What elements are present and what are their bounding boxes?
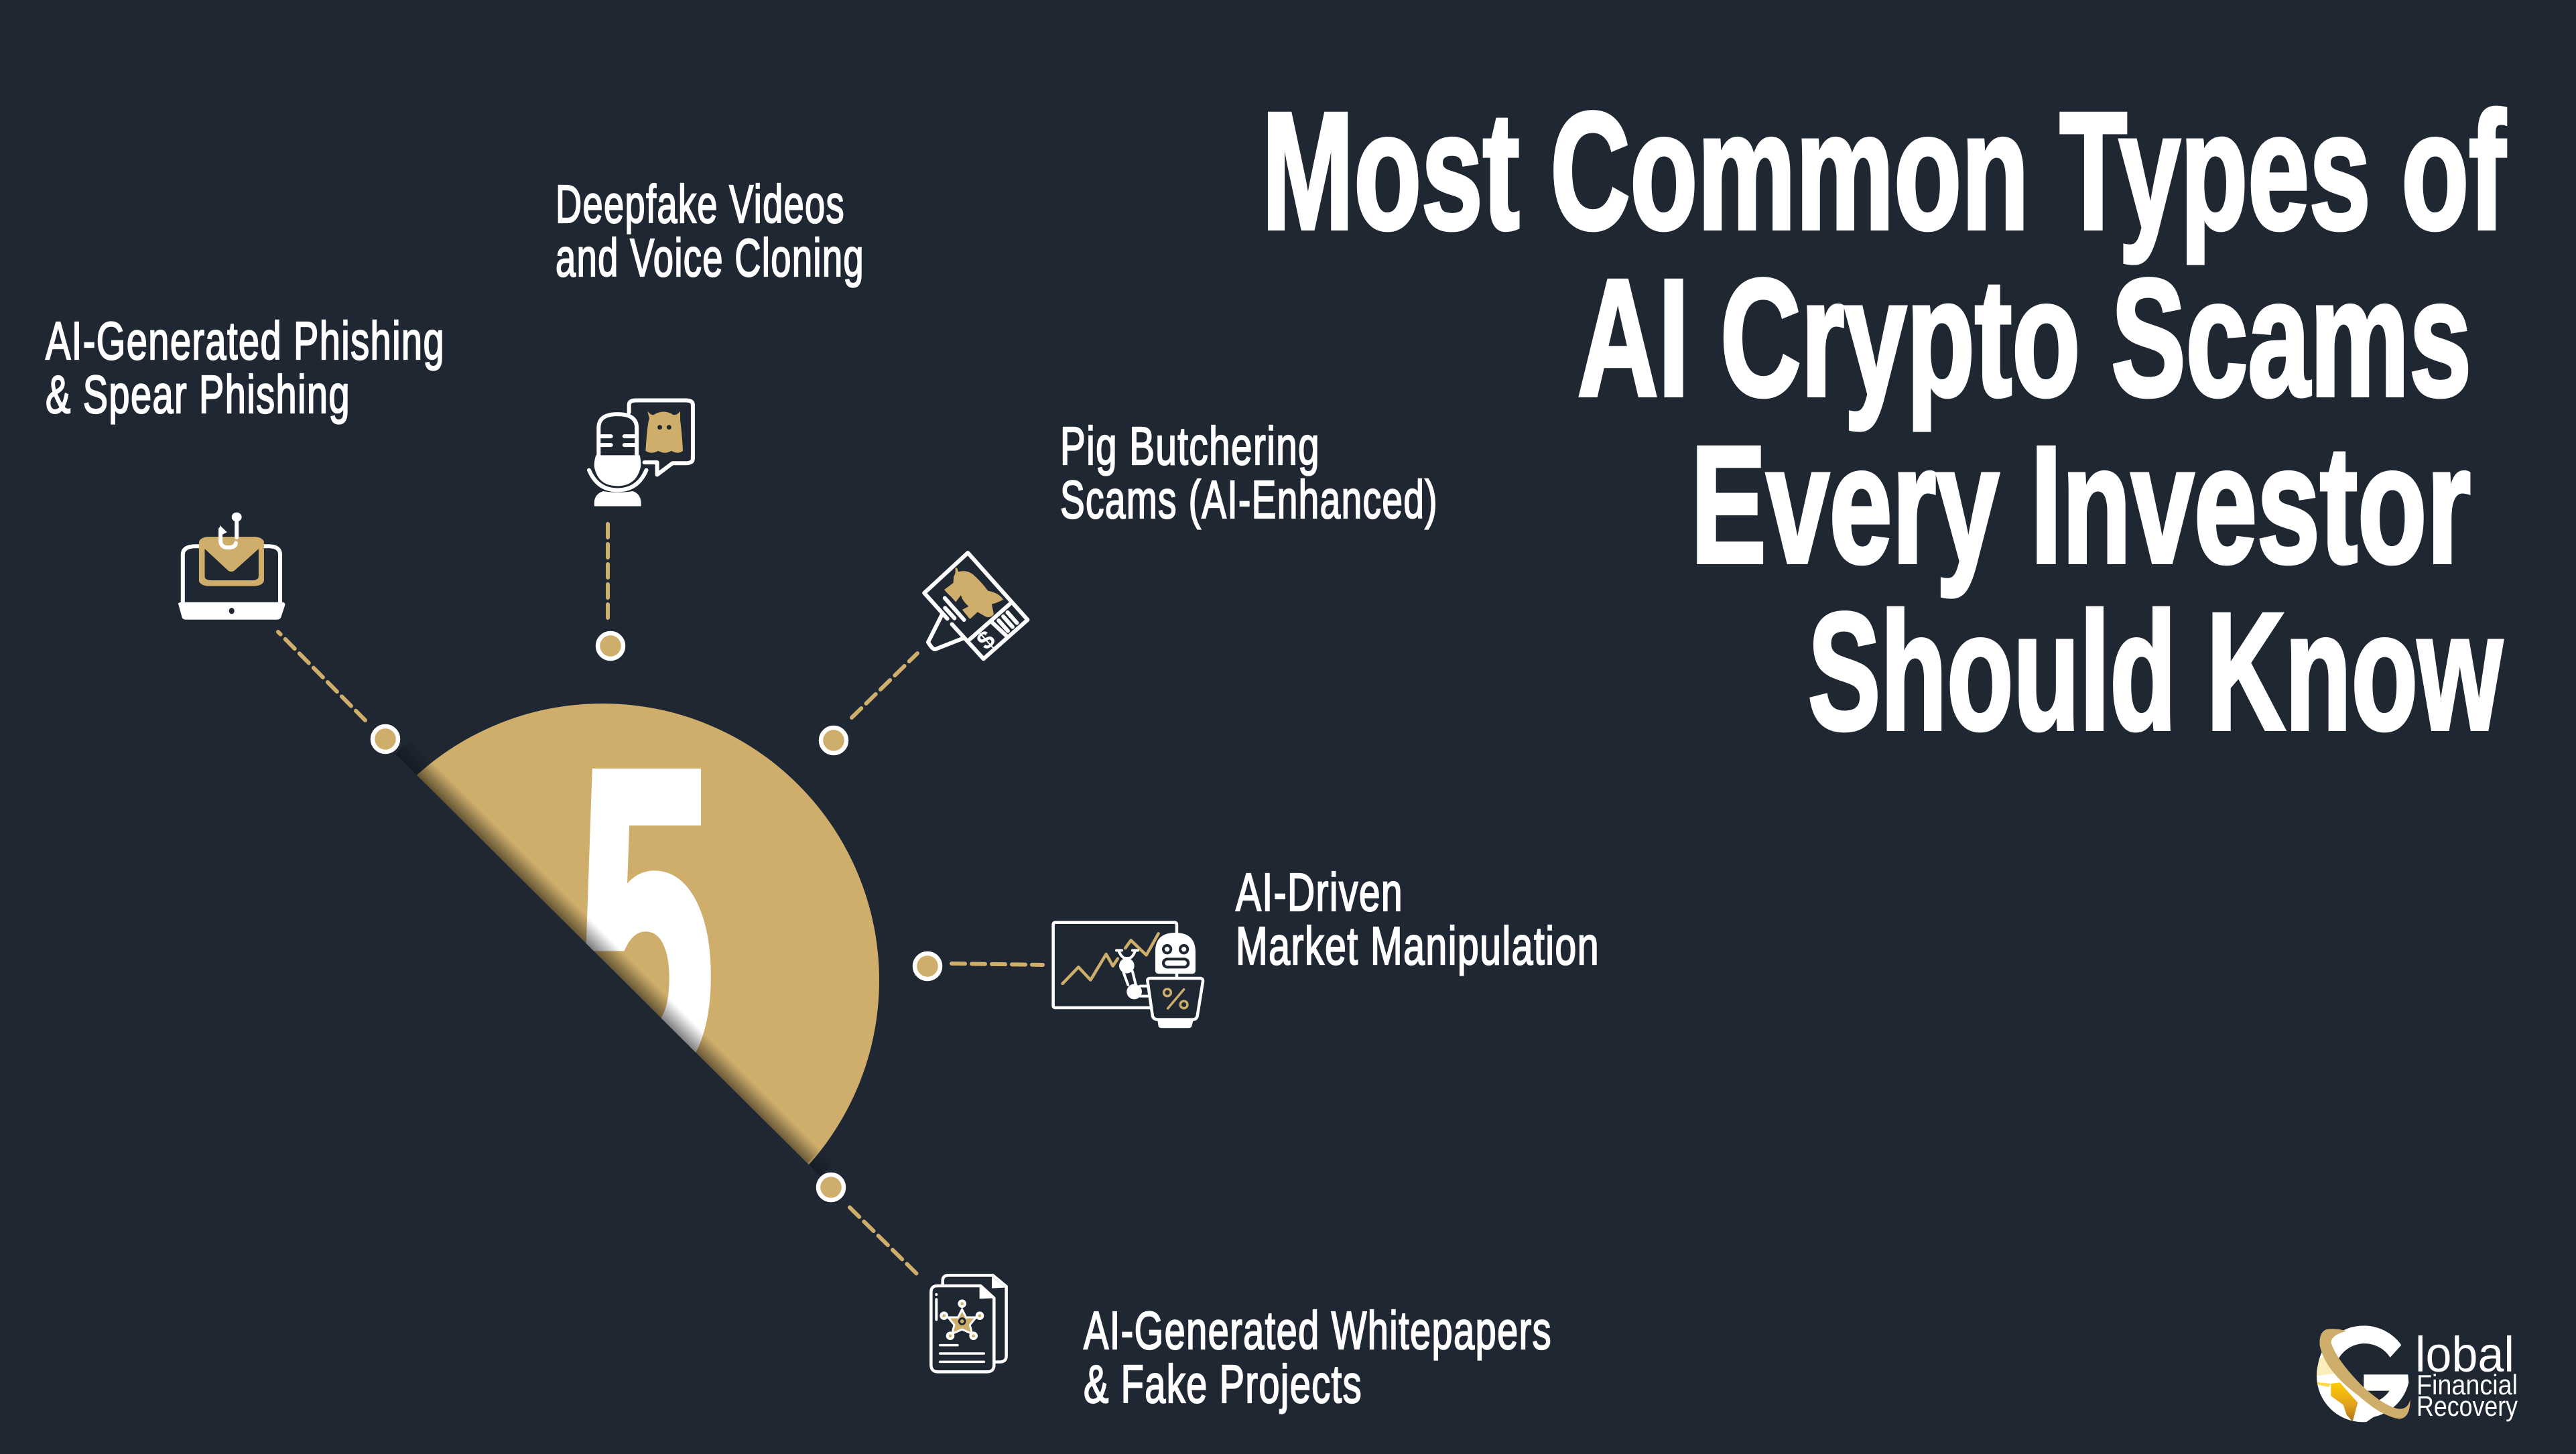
item 3: pig butchering label: Scams (AI-Enhanced) — [1060, 470, 1438, 529]
item 3: pig butchering label — [1060, 416, 1438, 529]
connector 2 — [598, 524, 623, 659]
connector 3 — [821, 653, 917, 753]
item 4: market manipulation label: Market Manipulation — [1236, 916, 1600, 976]
logo: Global Financial Recovery — [2312, 1325, 2518, 1427]
item 5: whitepapers label: AI-Generated Whitepapers — [1084, 1301, 1552, 1360]
item 1: AI-generated phishing label: AI-Generated Phishing — [46, 311, 445, 371]
logo: Global Financial Recovery: Recovery — [2417, 1390, 2518, 1422]
central gold semicircle with number 5 — [395, 704, 879, 1177]
item 5: whitepapers label: & Fake Projects — [1084, 1354, 1362, 1414]
item 1: AI-generated phishing label: & Spear Phishing — [46, 365, 350, 424]
icon: pig document paper plane — [924, 553, 1027, 659]
central gold semicircle with number 5: 5 — [577, 679, 714, 1171]
logo mark: globe, G and ribbon — [2312, 1325, 2410, 1427]
icon: pig document paper plane: $ — [972, 625, 1001, 655]
connector 4 — [915, 953, 1043, 979]
icon: microphone with ghost speech bubble — [589, 401, 693, 507]
item 2: deepfake label: Deepfake Videos — [556, 174, 845, 234]
logo: Global Financial Recovery: Financial — [2417, 1369, 2518, 1400]
logo: Global Financial Recovery: lobal — [2415, 1327, 2514, 1382]
item 1: AI-generated phishing label — [46, 311, 445, 424]
connector 1 — [278, 632, 398, 752]
item 2: deepfake label: and Voice Cloning — [556, 228, 864, 287]
item 3: pig butchering label: Pig Butchering — [1060, 416, 1320, 476]
connector 5 — [818, 1175, 917, 1274]
icon: fake project documents with star — [931, 1275, 1007, 1372]
item 4: market manipulation label — [1236, 862, 1600, 976]
item 5: whitepapers label — [1084, 1301, 1552, 1414]
title — [1262, 78, 2506, 765]
icon: robot with trading chart — [1053, 923, 1203, 1028]
item 4: market manipulation label: AI-Driven — [1236, 862, 1403, 922]
icon: laptop with phishing email — [178, 513, 285, 620]
item 2: deepfake label — [556, 174, 864, 287]
